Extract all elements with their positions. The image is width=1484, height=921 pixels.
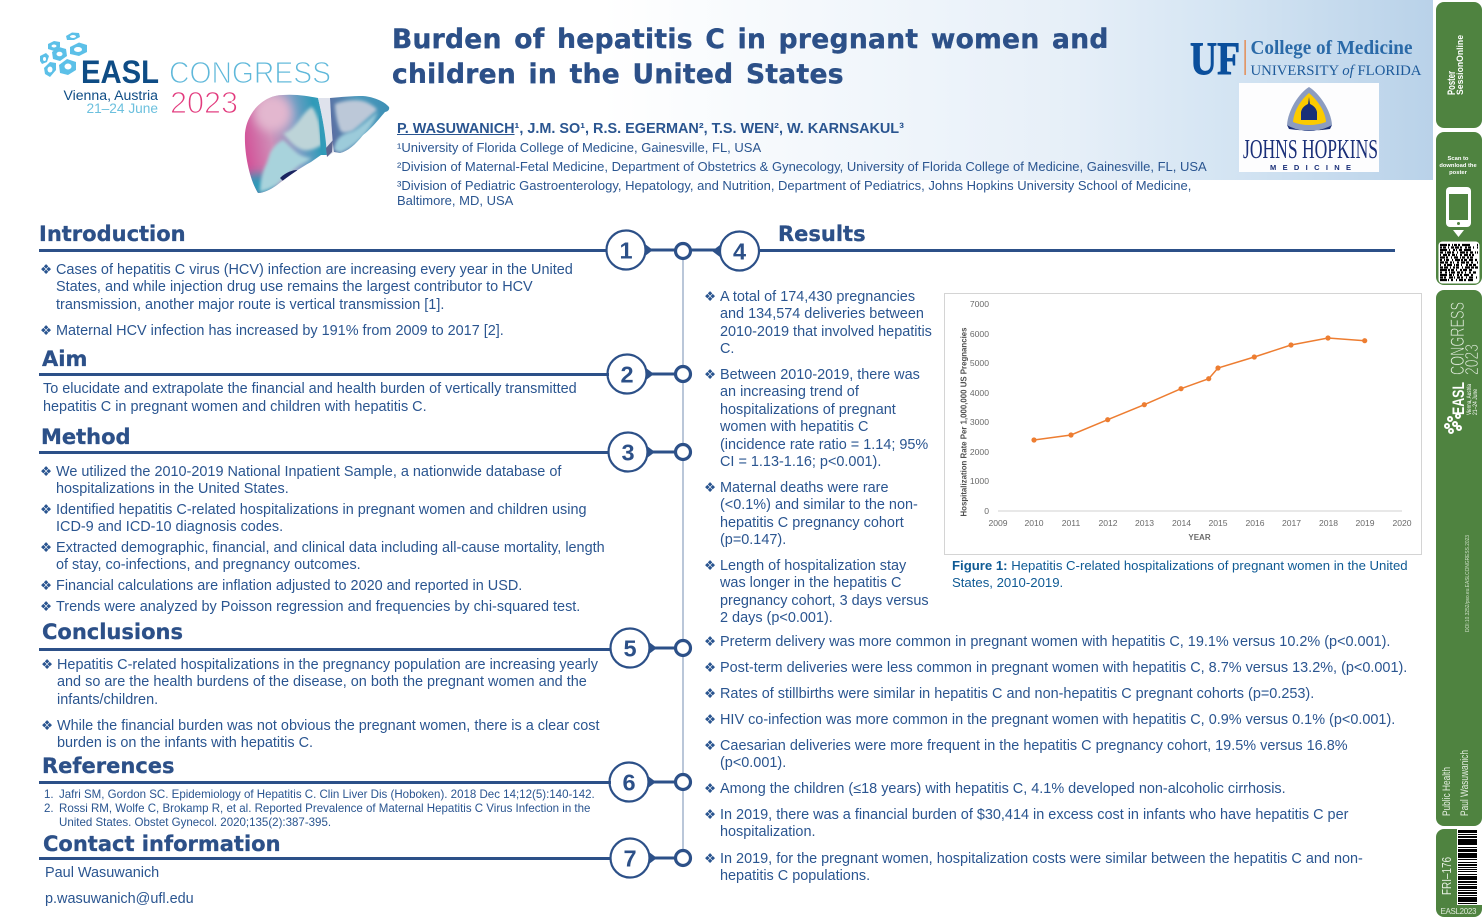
- text: results bullets beside chart: CI = 1.13-1.16; p<0.001).: [720, 454, 881, 470]
- number badge 3: [608, 432, 655, 472]
- sidebar: scan to download tab: poster: [1449, 170, 1468, 176]
- text: method bullets: ❖: [40, 578, 52, 594]
- number badge 1: [606, 230, 653, 270]
- text: results bullets full width: Among the children (≤18 years) with hepatitis C, 4.1% developed non-alcoholic cirrhosis.: [720, 781, 1286, 797]
- text: results bullets beside chart: hepatitis C pregnancy cohort: [720, 515, 904, 531]
- text: conclusions bullets: [41, 657, 600, 751]
- EASL Congress logo: Vienna, Austria: [63, 87, 158, 103]
- authors and affiliations: P. WASUWANICH¹, J.M. SO¹, R.S. EGERMAN², T.S. WEN², W. KARNSAKUL³: [397, 121, 904, 137]
- text: method bullets: ❖: [40, 464, 52, 480]
- sidebar: EASL congress and author tab: 21–24 June: [1473, 388, 1479, 415]
- text: introduction bullets: Cases of hepatitis C virus (HCV) infection are increasing every year in the United: [56, 262, 573, 278]
- line chart: hospitalization rate 2010-2019: 2020: [1392, 518, 1412, 528]
- panel: introduction: [39, 222, 606, 339]
- text: results bullets beside chart: ❖: [704, 289, 716, 305]
- title: children in the United States: [392, 59, 844, 90]
- text: results bullets beside chart: 2010-2019 that involved hepatitis: [720, 324, 932, 340]
- UF College of Medicine logo: College of Medicine: [1250, 38, 1413, 59]
- line chart: hospitalization rate 2010-2019: 2015: [1208, 518, 1228, 528]
- text: results bullets beside chart: (p=0.147).: [720, 532, 786, 548]
- text: results bullets full width: ❖: [704, 686, 716, 702]
- heading: contact information: Contact information: [43, 832, 281, 856]
- authors and affiliations: ³Division of Pediatric Gastroenterology, Hepatology, and Nutrition, Department of Pediatrics, Johns Hopkins University School of Medicine,: [397, 178, 1191, 193]
- sidebar: poster ID and barcode tab: FRI–176: [1440, 857, 1454, 895]
- text: results bullets full width: (p<0.001).: [720, 755, 786, 771]
- text: conclusions bullets: infants/children.: [57, 692, 158, 708]
- panel: contact information: [39, 832, 610, 907]
- text: reference list: 2.: [44, 803, 54, 815]
- text: conclusions bullets: and so are the health burdens of the disease, on both the pregnant women and the: [57, 674, 587, 690]
- text: results bullets full width: ❖: [704, 851, 716, 867]
- text: conclusions bullets: burden is on the infants with hepatitis C.: [57, 735, 313, 751]
- number badge 4: 4: [733, 238, 746, 264]
- Johns Hopkins Medicine logo: MEDICINE: [1270, 163, 1351, 172]
- text: results bullets beside chart: C.: [720, 341, 734, 357]
- text: results bullets beside chart: ❖: [704, 558, 716, 574]
- line chart: hospitalization rate 2010-2019: 2016: [1245, 518, 1265, 528]
- EASL Congress logo: CONGRESS: [169, 55, 331, 90]
- text: results bullets full width: In 2019, for the pregnant women, hospitalization costs were similar between the hepatitis C and non-: [720, 851, 1363, 867]
- panel: introduction: ❖: [40, 262, 52, 278]
- line chart: hospitalization rate 2010-2019: [944, 294, 1422, 554]
- text: conclusions bullets: Hepatitis C-related hospitalizations in the pregnancy population are increasing yearly: [57, 657, 598, 673]
- text: results bullets full width: Caesarian deliveries were more frequent in the hepatitis C pregnancy cohort, 19.5% versus 16.8%: [720, 738, 1348, 754]
- number badge 4: [712, 232, 759, 270]
- text: reference list: Rossi RM, Wolfe C, Brokamp R, et al. Reported Prevalence of Maternal Hepatitis C Virus Infection in the: [59, 803, 590, 815]
- text: results bullets full width: [704, 634, 1407, 884]
- sidebar: scan to download tab: [1436, 132, 1482, 285]
- line chart: hospitalization rate 2010-2019: 7000: [970, 299, 989, 309]
- text: results bullets beside chart: hospitalizations of pregnant: [720, 402, 896, 418]
- QR code: [1438, 242, 1480, 284]
- text: results bullets beside chart: and 134,574 deliveries between: [720, 306, 924, 322]
- text: introduction bullets: States, and while injection drug use remains the largest contributor to HCV: [56, 279, 533, 295]
- line chart: hospitalization rate 2010-2019: 2009: [988, 518, 1008, 528]
- text: reference list: United States. Obstet Gynecol. 2020;135(2):387-395.: [59, 817, 331, 829]
- sidebar: EASL congress and author tab: Paul Wasuwanich: [1459, 750, 1471, 816]
- title: [392, 24, 1109, 90]
- panel: aim: [39, 347, 609, 415]
- text: results bullets full width: ❖: [704, 660, 716, 676]
- text: results bullets full width: hepatitis C populations.: [720, 868, 870, 884]
- text: results bullets full width: ❖: [704, 634, 716, 650]
- line chart: hospitalization rate 2010-2019: 4000: [970, 388, 989, 398]
- number badge 3: 3: [621, 440, 635, 466]
- EASL Congress logo: 2023: [170, 85, 238, 120]
- text: results bullets full width: hospitalization.: [720, 824, 816, 840]
- text: results bullets full width: Post-term deliveries were less common in pregnant women with hepatitis C, 8.7% versus 13.2%, (p<0.001).: [720, 660, 1407, 676]
- line chart: hospitalization rate 2010-2019: Hospitalization Rate Per 1,000,000 US Pregnancies: [960, 327, 968, 516]
- title: Burden of hepatitis C in pregnant women and: [392, 24, 1109, 55]
- text: results bullets full width: ❖: [704, 781, 716, 797]
- line chart: hospitalization rate 2010-2019: 2010: [1024, 518, 1044, 528]
- text: reference list: Jafri SM, Gordon SC. Epidemiology of Hepatitis C. Clin Liver Dis (Hoboken). 2018 Dec 14;12(5):140-142.: [59, 789, 595, 801]
- sidebar: EASL congress and author tab: EASL: [1449, 382, 1468, 415]
- line chart: hospitalization rate 2010-2019: 2011: [1062, 518, 1080, 528]
- text: results bullets full width: ❖: [704, 712, 716, 728]
- text: introduction bullets: [40, 262, 573, 313]
- text: results bullets beside chart: pregnancy cohort, 3 days versus: [720, 593, 929, 609]
- number badge 6: 6: [622, 770, 636, 796]
- EASL Congress logo: 21–24 June: [86, 101, 158, 116]
- line chart: hospitalization rate 2010-2019: 5000: [970, 358, 989, 368]
- text: results bullets beside chart: A total of 174,430 pregnancies: [720, 289, 915, 305]
- Johns Hopkins Medicine logo: [1239, 83, 1379, 172]
- text: introduction bullets: transmission, another major route is vertical transmission [1].: [56, 297, 444, 313]
- text: aim statement: hepatitis C in pregnant women and children with hepatitis C.: [43, 399, 427, 415]
- sidebar: PosterSessionOnline tab: Poster: [1446, 71, 1458, 95]
- sidebar: scan to download tab: download the: [1439, 163, 1477, 169]
- text: reference list: [44, 789, 595, 829]
- text: results bullets full width: Rates of stillbirths were similar in hepatitis C and non-hepatitis C pregnant cohorts (p=0.253).: [720, 686, 1314, 702]
- figure caption: Figure 1: Hepatitis C-related hospitalizations of pregnant women in the United: [952, 558, 1408, 573]
- text: conclusions bullets: ❖: [41, 718, 53, 734]
- text: results bullets full width: HIV co-infection was more common in the pregnant women with hepatitis C, 0.9% versus 0.1% (p<0.001).: [720, 712, 1395, 728]
- text: results bullets beside chart: Between 2010-2019, there was: [720, 367, 920, 383]
- line chart: hospitalization rate 2010-2019: 2019: [1355, 518, 1375, 528]
- text: results bullets beside chart: ❖: [704, 367, 716, 383]
- text: results bullets beside chart: 2 days (p<0.001).: [720, 610, 833, 626]
- text: results bullets full width: ❖: [704, 738, 716, 754]
- sidebar: EASL congress and author tab: DOI:10.3252/pso.eu.EASLCONGRESS.2023: [1465, 535, 1471, 632]
- EASL Congress logo: [40, 32, 331, 120]
- header gradient band: [0, 0, 1433, 180]
- panel: introduction: ❖: [40, 323, 52, 339]
- number badge 5: [610, 628, 657, 668]
- heading: method: Method: [41, 425, 131, 449]
- text: conclusions bullets: While the financial burden was not obvious the pregnant women, there is a clear cost: [57, 718, 600, 734]
- text: method bullets: Identified hepatitis C-related hospitalizations in pregnant women and children using: [56, 502, 587, 518]
- panel: introduction: Maternal HCV infection has increased by 191% from 2009 to 2017 [2].: [56, 323, 504, 339]
- text: results bullets full width: ❖: [704, 807, 716, 823]
- text: method bullets: We utilized the 2010-2019 National Inpatient Sample, a nationwide database of: [56, 464, 561, 480]
- text: aim statement: [43, 381, 577, 415]
- text: results bullets beside chart: an increasing trend of: [720, 384, 859, 400]
- EASL Congress logo: EASL: [81, 54, 159, 90]
- heading: introduction: Introduction: [39, 222, 186, 246]
- text: results bullets beside chart: Maternal deaths were rare: [720, 480, 889, 496]
- text: aim statement: To elucidate and extrapolate the financial and health burden of vertically transmitted: [43, 381, 577, 397]
- text: results bullets beside chart: Length of hospitalization stay: [720, 558, 906, 574]
- line chart: hospitalization rate 2010-2019: YEAR: [1188, 533, 1211, 542]
- text: method bullets: Trends were analyzed by Poisson regression and frequencies by chi-squared test.: [56, 599, 580, 615]
- text: method bullets: hospitalizations in the United States.: [56, 481, 289, 497]
- line chart: hospitalization rate 2010-2019: 6000: [970, 329, 989, 339]
- sidebar: EASL congress and author tab: Vienna, Austria: [1467, 384, 1473, 415]
- line chart: hospitalization rate 2010-2019: 3000: [970, 417, 989, 427]
- sidebar: EASL congress and author tab: 2023: [1462, 344, 1482, 375]
- sidebar: poster ID and barcode tab: [1436, 829, 1482, 917]
- number badge 7: 7: [623, 846, 637, 872]
- line chart: hospitalization rate 2010-2019: 2012: [1098, 518, 1118, 528]
- number badge 7: [610, 838, 657, 878]
- line chart: hospitalization rate 2010-2019: 1000: [970, 476, 989, 486]
- text: results bullets full width: Preterm delivery was more common in pregnant women with hepatitis C, 19.1% versus 10.2% (p<0.001).: [720, 634, 1390, 650]
- icon: liver: [238, 94, 389, 198]
- line chart: hospitalization rate 2010-2019: 0: [984, 506, 989, 516]
- icon: sidebar hexagons: [1445, 414, 1461, 433]
- heading: results: Results: [778, 222, 866, 246]
- line chart: hospitalization rate 2010-2019: 2018: [1319, 518, 1338, 528]
- number badge 5: 5: [623, 636, 637, 662]
- text: contact details: p.wasuwanich@ufl.edu: [45, 891, 194, 907]
- figure caption: States, 2010-2019.: [952, 575, 1063, 590]
- text: results bullets beside chart: (<0.1%) and similar to the non-: [720, 497, 918, 513]
- sidebar: PosterSessionOnline tab: SessionOnline: [1455, 35, 1466, 95]
- text: conclusions bullets: ❖: [41, 657, 53, 673]
- authors and affiliations: ¹University of Florida College of Medicine, Gainesville, FL, USA: [397, 140, 761, 155]
- icon: EASL hexagons: [40, 32, 87, 77]
- panel: method: [39, 425, 608, 615]
- sidebar: scan to download tab: Scan to: [1448, 156, 1469, 162]
- panel: results: [704, 222, 1407, 884]
- text: contact details: [45, 865, 194, 907]
- number badge 2: 2: [620, 362, 634, 388]
- line chart: hospitalization rate 2010-2019: 2014: [1172, 518, 1191, 528]
- icon: phone: [1446, 187, 1471, 227]
- text: results bullets beside chart: ❖: [704, 480, 716, 496]
- panel: conclusions: [39, 620, 610, 751]
- timeline connector: [645, 244, 720, 866]
- authors and affiliations: ²Division of Maternal-Fetal Medicine, Department of Obstetrics & Gynecology, University of Florida College of Medicine, Gainesville, FL, USA: [397, 159, 1207, 174]
- text: results bullets beside chart: women with hepatitis C: [720, 419, 868, 435]
- sidebar: EASL congress and author tab: CONGRESS: [1448, 302, 1469, 375]
- text: method bullets: [40, 464, 605, 615]
- line chart: hospitalization rate 2010-2019: 2013: [1135, 518, 1154, 528]
- panel: references: [39, 754, 611, 829]
- Johns Hopkins Medicine logo: JOHNS HOPKINS: [1243, 134, 1378, 164]
- number badge 6: [610, 762, 656, 802]
- figure caption: [952, 558, 1408, 590]
- text: method bullets: ICD-9 and ICD-10 diagnosis codes.: [56, 519, 283, 535]
- sidebar: EASL congress and author tab: [1436, 290, 1482, 826]
- sidebar: poster ID and barcode tab: EASL2023: [1440, 907, 1477, 916]
- text: method bullets: ❖: [40, 502, 52, 518]
- text: method bullets: ❖: [40, 540, 52, 556]
- line chart: hospitalization rate 2010-2019: 2000: [970, 447, 989, 457]
- text: results bullets beside chart: was longer in the hepatitis C: [720, 575, 901, 591]
- heading: aim: Aim: [42, 347, 87, 371]
- text: method bullets: Financial calculations are inflation adjusted to 2020 and reported in USD.: [56, 578, 522, 594]
- authors and affiliations: [397, 121, 1207, 208]
- UF College of Medicine logo: UF: [1190, 33, 1240, 85]
- text: results bullets beside chart: [704, 289, 932, 626]
- text: method bullets: of stay, co-infections, and pregnancy outcomes.: [56, 557, 361, 573]
- text: contact details: Paul Wasuwanich: [45, 865, 159, 881]
- heading: conclusions: Conclusions: [42, 620, 183, 644]
- number badge 2: [608, 354, 654, 394]
- text: method bullets: Extracted demographic, financial, and clinical data including all-cause mortality, length: [56, 540, 605, 556]
- UF College of Medicine logo: UNIVERSITY of FLORIDA: [1250, 63, 1422, 79]
- authors and affiliations: Baltimore, MD, USA: [397, 193, 513, 208]
- sidebar: EASL congress and author tab: Public Health: [1441, 767, 1453, 816]
- number badge 1: 1: [619, 238, 633, 264]
- line chart: hospitalization rate 2010-2019: 2017: [1282, 518, 1301, 528]
- text: results bullets beside chart: (incidence rate ratio = 1.14; 95%: [720, 437, 928, 453]
- sidebar: PosterSessionOnline tab: [1436, 2, 1482, 128]
- text: results bullets full width: In 2019, there was a financial burden of $30,414 in excess cost in infants who have hepatitis C per: [720, 807, 1348, 823]
- UF College of Medicine logo: [1190, 33, 1422, 85]
- text: method bullets: ❖: [40, 599, 52, 615]
- heading: references: References: [42, 754, 175, 778]
- text: reference list: 1.: [44, 789, 54, 801]
